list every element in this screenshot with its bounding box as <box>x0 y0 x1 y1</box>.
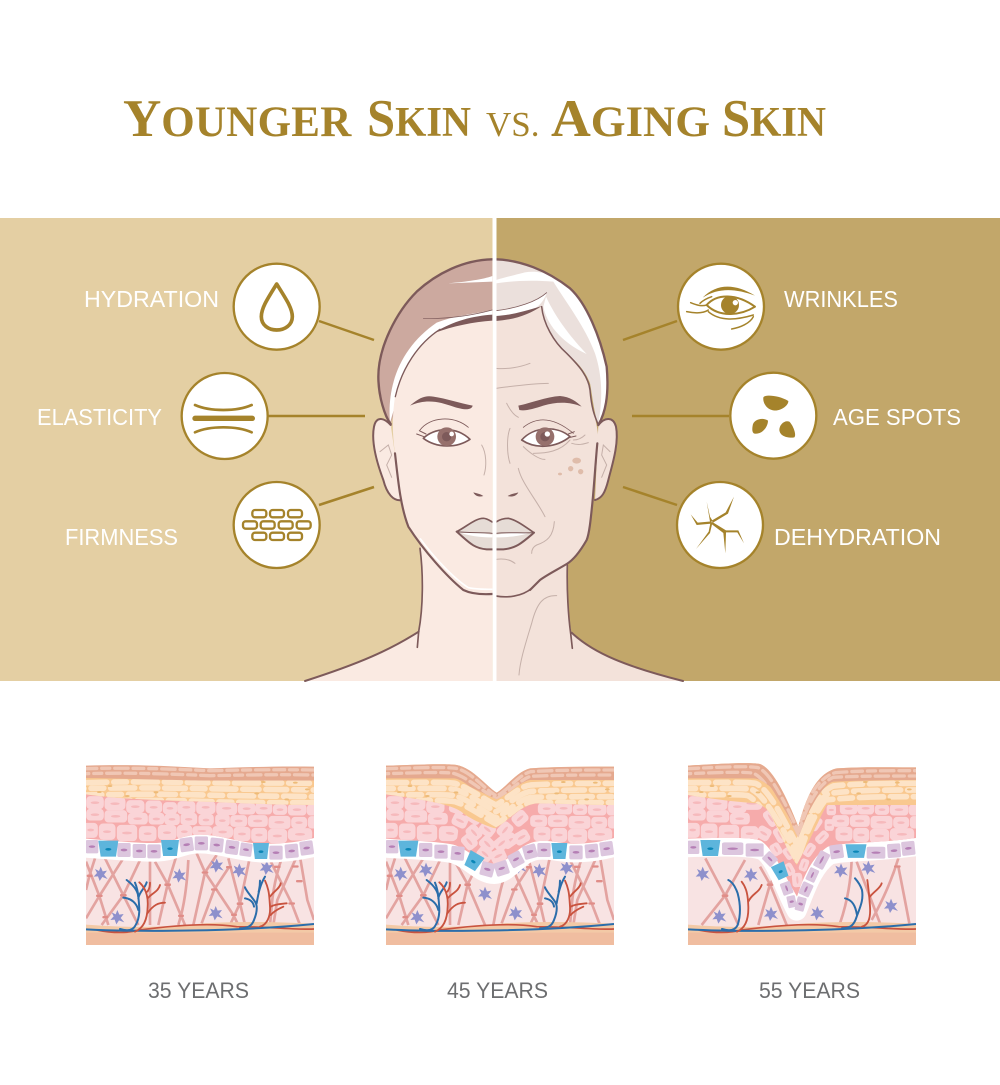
icon: age spots <box>730 373 816 459</box>
younger hair highlight <box>390 310 492 423</box>
fat layer <box>386 922 614 945</box>
stratum corneum <box>688 760 916 840</box>
younger face <box>393 317 492 594</box>
left ear <box>373 419 402 500</box>
spinous cells <box>86 794 314 844</box>
fat layer <box>86 922 314 945</box>
collagen fibres <box>86 853 314 925</box>
stratum corneum <box>86 765 314 780</box>
right ear <box>595 419 617 500</box>
right eye <box>522 420 576 446</box>
label: dehydration: DEHYDRATION <box>774 524 941 550</box>
age spots on cheek <box>558 458 583 475</box>
title: SKIN <box>367 90 471 148</box>
collagen fibres <box>702 858 909 925</box>
label: age spots: AGE SPOTS <box>833 404 961 430</box>
basal cells <box>386 840 614 878</box>
neck and shoulder outlines <box>305 548 683 681</box>
icon: elasticity lines <box>182 373 268 459</box>
title: YOUNGER <box>123 90 352 148</box>
panel: younger skin background <box>0 218 492 681</box>
granular layer <box>86 778 314 805</box>
basement band <box>80 843 320 852</box>
title: VS. <box>486 105 540 144</box>
stratum corneum <box>386 764 614 800</box>
blood vessels <box>386 877 614 933</box>
younger jaw line <box>395 453 492 594</box>
dermis <box>688 856 916 927</box>
basal cells <box>687 840 916 912</box>
label: elasticity: ELASTICITY <box>37 404 162 430</box>
left eye <box>417 419 470 446</box>
icon: dehydration cracks <box>677 482 763 568</box>
aging jaw line <box>496 443 597 597</box>
title: SKIN <box>722 90 826 148</box>
spinous cells <box>386 794 614 864</box>
caption: 55 years: 55 YEARS <box>759 978 860 1003</box>
panel: aging skin background <box>496 218 1000 681</box>
basement band <box>682 845 922 911</box>
connector lines <box>268 321 729 505</box>
right icons <box>677 264 816 568</box>
icon: wrinkled eye <box>678 264 764 350</box>
icon: firmness bricks <box>234 482 320 568</box>
blood vessels <box>688 878 916 933</box>
caption: 45 years: 45 YEARS <box>447 978 548 1003</box>
younger half neck and shoulders <box>305 540 492 681</box>
title <box>123 89 826 148</box>
icon: hydration drop <box>234 264 320 350</box>
aging hair <box>496 259 608 425</box>
blood vessels <box>86 877 314 933</box>
center divider <box>492 218 496 681</box>
fibroblast stars <box>94 858 274 924</box>
spinous cells <box>688 795 916 896</box>
dermis <box>386 857 614 927</box>
wrinkles <box>482 363 588 675</box>
granular layer <box>386 764 614 828</box>
left icons <box>182 264 320 568</box>
fibroblast stars <box>394 859 574 924</box>
younger hair outline <box>378 259 492 424</box>
lips <box>457 518 534 549</box>
basement band <box>380 845 620 874</box>
label: hydration: HYDRATION <box>84 286 219 312</box>
fibroblast stars <box>696 861 898 924</box>
skin diagram: 35 years <box>77 760 320 945</box>
label: wrinkles: WRINKLES <box>784 286 898 312</box>
right eyebrow <box>518 396 582 410</box>
aging face <box>496 307 598 597</box>
dermis <box>86 854 314 927</box>
caption: 35 years: 35 YEARS <box>148 978 249 1003</box>
aging hair highlights <box>496 272 608 423</box>
nostrils <box>473 492 518 497</box>
aging half neck and shoulders <box>496 540 683 681</box>
granular layer <box>688 760 916 870</box>
title: AGING <box>551 89 710 148</box>
skin diagram: 55 years <box>682 760 922 945</box>
fat layer <box>688 922 916 945</box>
face illustration <box>305 259 683 681</box>
aging hair outline <box>496 259 607 425</box>
left eyebrow <box>410 396 473 409</box>
collagen fibres <box>386 857 614 925</box>
label: firmness: FIRMNESS <box>65 524 178 550</box>
basal cells <box>86 836 314 860</box>
skin diagram: 45 years <box>380 760 620 945</box>
younger hair <box>378 259 492 424</box>
